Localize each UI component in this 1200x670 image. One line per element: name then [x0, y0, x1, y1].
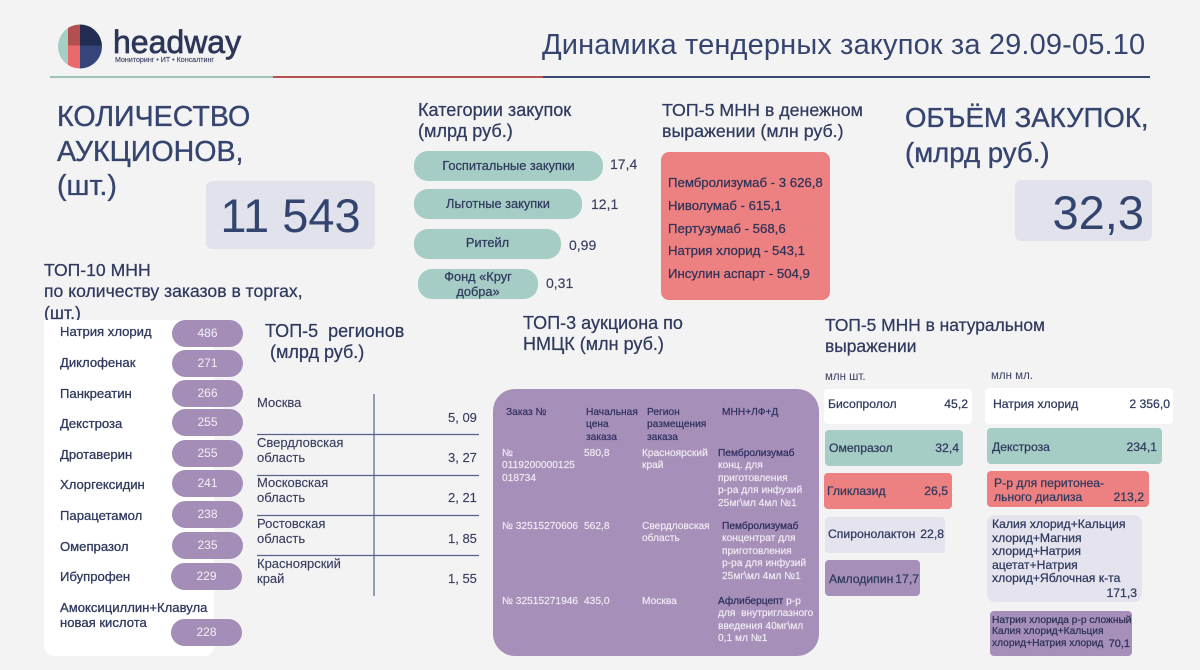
- panel: top-3 auctions: Москва: [642, 596, 677, 607]
- logo wordmark: headway: [113, 24, 241, 60]
- panel: top-3 auctions: Пембролизумаб: [722, 521, 798, 532]
- heading: top-5 money: выражении (млн руб.): [662, 121, 844, 141]
- row: Rostov: Ростовская: [257, 516, 325, 531]
- pill: 241: [172, 470, 243, 497]
- bar: fund: добра»: [456, 284, 500, 299]
- panel: top-3 auctions: цена: [586, 419, 609, 430]
- row: Moscow region: [257, 475, 328, 505]
- row 2: № 32515270606: [502, 521, 578, 532]
- panel: top-3 auctions: введения 40мг\мл: [718, 621, 803, 632]
- value: retail: 0,99: [569, 237, 596, 253]
- label: mln pcs: млн шт.: [825, 371, 866, 383]
- heading: top-10: ТОП-10 МНН: [44, 260, 151, 280]
- panel: top-3 auctions: МНН+ЛФ+Д: [722, 407, 778, 418]
- bar: hospital: Госпитальные закупки: [442, 158, 575, 173]
- heading: categories: Категории закупок: [418, 100, 571, 120]
- bar: gliclazide: Гликлазид: [827, 484, 886, 498]
- bar: preferential: [414, 189, 582, 219]
- bar: sodium chloride: 2 356,0: [1129, 397, 1170, 411]
- panel: top-3 auctions: [493, 389, 819, 656]
- row: Moscow region: область: [257, 490, 305, 505]
- bar: peritoneal dialysis: [987, 471, 1149, 507]
- bar: fund: [418, 269, 538, 299]
- logo tagline: Мониторинг • ИТ • Консалтинг: [115, 56, 214, 64]
- panel: top-3 auctions: Свердловская: [642, 521, 710, 532]
- panel: top-3 auctions: конц. для: [718, 460, 763, 471]
- pill: 271: [172, 350, 243, 377]
- panel: top-10 list: новая кислота: [60, 615, 147, 630]
- bar: gliclazide: 26,5: [924, 484, 948, 498]
- row: Rostov: область: [257, 531, 305, 546]
- panel: top-3 auctions: 562,8: [584, 521, 610, 532]
- heading: categories: [418, 100, 572, 142]
- panel: top-3 auctions: концентрат для: [722, 533, 796, 544]
- panel: top-3 auctions: 25мг\мл 4мл №1: [718, 498, 797, 509]
- panel: top-3 auctions: приготовления: [718, 473, 788, 484]
- row: Krasnoyarsk: [257, 556, 341, 586]
- panel: top-3 auctions: 580,8: [584, 448, 610, 459]
- panel: top-3 auctions: Красноярский: [642, 448, 708, 459]
- pill: 255: 255: [197, 415, 218, 429]
- logo: [58, 24, 242, 68]
- label: mln ml: млн мл.: [991, 370, 1033, 382]
- stat: auctions count: [206, 181, 375, 249]
- pill: 228: [171, 619, 242, 646]
- heading: top-3 auctions: [523, 313, 683, 354]
- panel: top-10 list: Декстроза: [60, 416, 122, 431]
- heading: purchase volume: ОБЪЁМ ЗАКУПОК,: [905, 102, 1149, 133]
- heading: auctions count: (шт.): [57, 170, 117, 202]
- bar: preferential: Льготные закупки: [446, 196, 550, 211]
- panel: top-5 money: Пембролизумаб - 3 626,8: [668, 175, 823, 190]
- bar: complex sodium chloride: хлорид+Натрия хлорид: [992, 638, 1103, 649]
- panel: purchase categories: [414, 100, 637, 299]
- bar: amlodipine: [825, 560, 920, 596]
- icon: logo circle: [58, 24, 102, 68]
- heading: top-5 money: [662, 100, 863, 141]
- panel: top-10 list: Хлоргексидин: [60, 477, 145, 492]
- value: fund: 0,31: [546, 275, 573, 291]
- bar: complex sodium chloride: 70,1: [1109, 638, 1130, 650]
- panel: top-3 auctions: Регион: [647, 407, 680, 418]
- bar: fund: Фонд «Круг: [444, 269, 512, 284]
- pill: 266: 266: [197, 386, 218, 400]
- heading: top-10: по количеству заказов в торгах,: [44, 281, 303, 301]
- row 3: № 32515271946: [502, 596, 578, 607]
- heading: top-5 regions: [265, 321, 404, 362]
- bar: peritoneal dialysis: льного диализа: [994, 490, 1082, 504]
- bar: potassium chloride: хлорид+Яблочная к-та: [992, 571, 1120, 585]
- heading: auctions count: [56, 101, 250, 202]
- table head: Заказ №: [506, 407, 546, 418]
- row 1: 018734: [502, 473, 536, 484]
- row 1: [502, 448, 575, 484]
- bar: amlodipine: Амлодипин: [829, 572, 893, 586]
- row 1: 0119200000125: [502, 460, 575, 471]
- panel: top-5 money: Инсулин аспарт - 504,9: [668, 266, 810, 281]
- row: Krasnoyarsk: край: [257, 571, 284, 586]
- panel: top-3 auctions: заказа: [647, 432, 678, 443]
- pill: 255: [172, 440, 243, 467]
- bar: dextrose: [987, 428, 1162, 464]
- panel: top-10 list: [44, 320, 214, 656]
- panel: top-3 auctions: 25мг\мл 4мл №1: [722, 571, 801, 582]
- row: Sverdlovsk: Свердловская: [257, 435, 343, 450]
- panel: top-10 list: Омепразол: [60, 539, 128, 554]
- pill: 266: [172, 380, 243, 407]
- panel: top-3 auctions: р-ра для инфузий: [718, 485, 802, 496]
- bar: omeprazole: 32,4: [935, 441, 959, 455]
- heading: top-5 money: ТОП-5 МНН в денежном: [662, 100, 863, 120]
- bar: bisoprolol: 45,2: [944, 397, 968, 411]
- bar: potassium chloride: [987, 515, 1142, 602]
- table: top-5 regions: [257, 394, 479, 596]
- panel: top-3 auctions: 0,1 мл №1: [718, 633, 767, 644]
- bar: sodium chloride: Натрия хлорид: [993, 397, 1078, 411]
- row 1: №: [502, 448, 513, 459]
- panel: top-5 money: [661, 152, 830, 300]
- bar: spironolactone: 22,8: [920, 527, 944, 541]
- bar: retail: [414, 229, 561, 259]
- pill: 255: 255: [197, 446, 218, 460]
- bar: potassium chloride: ацетат+Натрия: [992, 558, 1078, 572]
- panel: top-3 auctions: приготовления: [722, 546, 792, 557]
- panel: top-3 auctions: область: [642, 533, 680, 544]
- panel: top-3 auctions: Афлиберцепт р-р: [718, 596, 801, 607]
- value: Moscow region: 2, 21: [448, 490, 477, 505]
- table lines: [257, 394, 479, 596]
- heading: top-10: [44, 260, 303, 323]
- panel: top-3 auctions: Начальная: [586, 407, 638, 418]
- bar: dextrose: 234,1: [1126, 440, 1157, 454]
- panel: top-3 auctions: Пембролизумаб: [718, 448, 794, 459]
- value: Rostov: 1, 85: [448, 531, 477, 546]
- panel: top-10 list: Ибупрофен: [60, 569, 130, 584]
- pill: 228: 228: [196, 625, 217, 639]
- rows: drug names: Натрия хлорид: [60, 324, 152, 339]
- pill: 486: [172, 320, 243, 347]
- panel: top-5 money: Ниволумаб - 615,1: [668, 198, 782, 213]
- bar: potassium chloride: хлорид+Натрия: [992, 544, 1081, 558]
- panel: top-3 auctions: 435,0: [584, 596, 610, 607]
- header rule: [50, 76, 1150, 78]
- heading: top-5 natural: ТОП-5 МНН в натуральном: [825, 315, 1045, 335]
- bar: complex sodium chloride: Натрия хлорида р-р сложный: [992, 615, 1132, 626]
- bar: amlodipine: 17,7: [895, 572, 919, 586]
- stat: purchase volume: [1015, 180, 1152, 241]
- panel: top-10 list: Панкреатин: [60, 386, 132, 401]
- bar: sodium chloride: [985, 388, 1173, 424]
- bar: omeprazole: [825, 430, 963, 466]
- pill: 229: 229: [196, 569, 217, 583]
- panel: top-3 auctions: для внутриглазного: [718, 608, 813, 619]
- value: Krasnoyarsk: 1, 55: [448, 571, 477, 586]
- heading: top-5 natural: выражении: [825, 336, 916, 356]
- pill: 235: 235: [197, 538, 218, 552]
- heading: purchase volume: [905, 102, 1149, 168]
- panel: top-10 list: Дротаверин: [60, 447, 132, 462]
- bar: complex sodium chloride: [990, 611, 1132, 656]
- panel: top-3 auctions: заказа: [586, 432, 617, 443]
- heading: top-10: (шт.): [44, 303, 81, 323]
- panel: top-5 money: Пертузумаб - 568,6: [668, 221, 786, 236]
- panel: top-5 money: Натрия хлорид - 543,1: [668, 243, 805, 258]
- value: Moscow: 5, 09: [448, 410, 477, 425]
- heading: top-5 natural: [825, 315, 1045, 356]
- heading: top-3 auctions: ТОП-3 аукциона по: [523, 313, 683, 333]
- pill: 238: 238: [197, 507, 218, 521]
- stat: purchase volume: 32,3: [1053, 186, 1144, 239]
- row: Sverdlovsk: область: [257, 450, 305, 465]
- heading: auctions count: КОЛИЧЕСТВО: [57, 101, 250, 133]
- row: Krasnoyarsk: Красноярский: [257, 556, 341, 571]
- bar: peritoneal dialysis: 213,2: [1114, 490, 1144, 504]
- bar: bisoprolol: Бисопролол: [828, 397, 897, 411]
- stat: auctions count: 11 543: [220, 189, 361, 242]
- heading: categories: (млрд руб.): [418, 121, 513, 141]
- title: Динамика тендерных закупок за 29.09-05.10: [542, 29, 1145, 61]
- bar: potassium chloride: Калия хлорид+Кальция: [992, 517, 1125, 531]
- panel: top-3 auctions: р-ра для инфузий: [722, 558, 806, 569]
- value: preferential: 12,1: [591, 196, 618, 212]
- bar: spironolactone: [825, 517, 945, 553]
- heading: purchase volume: (млрд руб.): [905, 137, 1050, 168]
- pill: 255: [172, 409, 243, 436]
- panel: top-3 auctions: край: [642, 460, 663, 471]
- pill: 271: 271: [197, 356, 218, 370]
- bar: retail: Ритейл: [466, 235, 509, 250]
- bar: bisoprolol: [824, 389, 972, 424]
- value: hospital: 17,4: [610, 156, 637, 172]
- row: Rostov: [257, 516, 325, 546]
- row: Moscow region: Московская: [257, 475, 328, 490]
- panel: top-3 auctions: размещения: [647, 419, 706, 430]
- heading: top-3 auctions: НМЦК (млн руб.): [523, 334, 664, 354]
- panel: top-10 list: Парацетамол: [60, 508, 142, 523]
- value: Sverdlovsk: 3, 27: [448, 450, 477, 465]
- pill: 241: 241: [197, 476, 218, 490]
- pill: 238: [172, 501, 243, 528]
- panel: top-10 list: Диклофенак: [60, 355, 135, 370]
- bar: dextrose: Декстроза: [992, 440, 1050, 454]
- pill: 229: [171, 563, 242, 590]
- panel: top-10 list: Амоксициллин+Клавула: [60, 600, 207, 615]
- bar: hospital: [414, 151, 603, 181]
- bar: complex sodium chloride: Калия хлорид+Кальция: [992, 626, 1104, 637]
- heading: top-5 regions: (млрд руб.): [270, 342, 364, 362]
- pill: 486: 486: [197, 326, 218, 340]
- bar: gliclazide: [824, 473, 952, 509]
- pill: 235: [172, 532, 243, 559]
- bar: peritoneal dialysis: Р-р для перитонеа-: [994, 476, 1104, 490]
- bar: omeprazole: Омепразол: [829, 441, 893, 455]
- heading: auctions count: АУКЦИОНОВ,: [57, 136, 244, 168]
- bar: potassium chloride: 171,3: [1106, 586, 1137, 600]
- row: Moscow: Москва: [257, 395, 301, 410]
- bar: spironolactone: Спиронолактон: [828, 527, 915, 541]
- bar: potassium chloride: хлорид+Магния: [992, 531, 1082, 545]
- row: Sverdlovsk: [257, 435, 343, 465]
- heading: top-5 regions: ТОП-5 регионов: [265, 321, 404, 341]
